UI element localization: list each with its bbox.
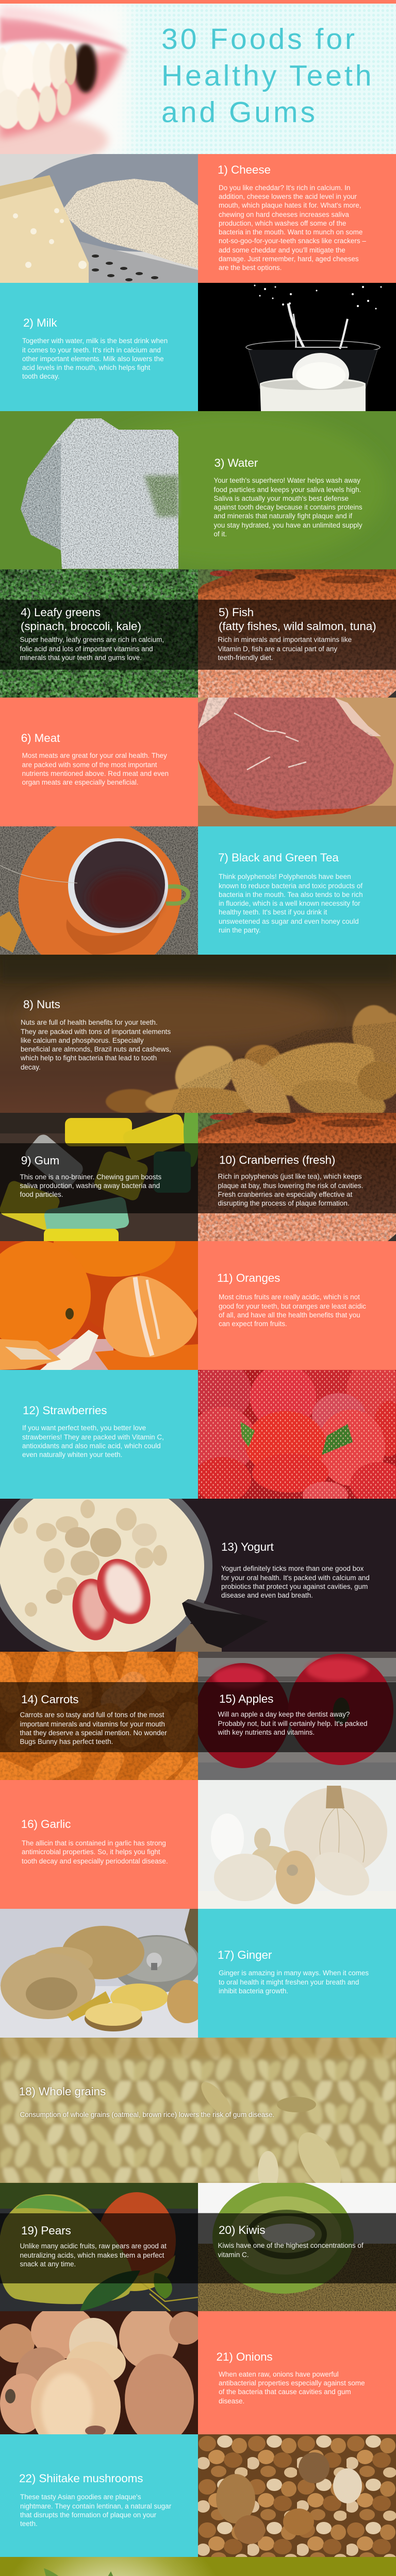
photo: smiling mouth bbox=[0, 4, 134, 154]
text block: Unlike many acidic fruits, raw pears are good at bbox=[20, 2242, 167, 2250]
text block: against tooth decay because it contains proteins bbox=[213, 503, 362, 511]
text block: are packed with some of the most important bbox=[22, 761, 157, 769]
text block: Most meats are great for your oral health. They bbox=[22, 752, 167, 759]
text block: which help to fight bacteria that lead to tooth bbox=[21, 1054, 157, 1062]
text block: These tasty Asian goodies are plaque's bbox=[20, 2493, 141, 2501]
heading: 19) Pears bbox=[21, 2224, 71, 2237]
panel: 10 cranberries bbox=[198, 1143, 396, 1213]
text block: disease. bbox=[219, 2397, 244, 2405]
text: celery bbox=[198, 2556, 396, 2576]
text block: that disrupts the formation of plaque on your bbox=[20, 2511, 156, 2519]
text block: nightmare. They contain lentinan, a natural sugar bbox=[20, 2502, 171, 2510]
text: yogurt bbox=[221, 1540, 370, 1599]
text block: food particles. bbox=[20, 1191, 63, 1198]
text block: antibacterial properties especially against some bbox=[219, 2379, 365, 2387]
text block: that they deserve a special mention. No wonder bbox=[20, 1729, 167, 1737]
text block: bacteria in the mouth. Want to munch on some bbox=[219, 228, 362, 236]
heading: 3) Water bbox=[214, 456, 258, 469]
text block bbox=[20, 2493, 171, 2528]
panel: 18 whole grains bbox=[0, 2037, 396, 2183]
panel: 11 oranges bbox=[198, 1241, 396, 1370]
text block: Carrots are so tasty and full of tons of the most bbox=[20, 1711, 164, 1719]
text block: Will an apple a day keep the dentist away? bbox=[218, 1710, 350, 1718]
text block: strawberries! They are packed with Vitamin C, bbox=[22, 1433, 164, 1441]
text block bbox=[221, 1565, 370, 1599]
text block: of it. bbox=[213, 530, 227, 538]
heading: 6) Meat bbox=[21, 732, 60, 744]
text block: inhibit bacteria growth. bbox=[219, 1987, 288, 1995]
photo: cup of tea bbox=[0, 826, 198, 955]
heading bbox=[21, 606, 141, 633]
text block: beneficial are almonds, Brazil nuts and cashews, bbox=[21, 1045, 171, 1053]
heading: 9) Gum bbox=[21, 1154, 59, 1167]
text block: tooth decay. bbox=[22, 372, 60, 380]
text block: plaque at bay, thus lowering the risk of cavities. bbox=[218, 1182, 363, 1190]
panel: 19 pears bbox=[0, 2213, 198, 2283]
photo: kiwi bbox=[198, 2183, 396, 2311]
heading: 7) Black and Green Tea bbox=[218, 851, 339, 864]
heading: 20) Kiwis bbox=[219, 2224, 265, 2236]
heading bbox=[219, 606, 376, 633]
heading: 13) Yogurt bbox=[221, 1540, 274, 1553]
text block: it comes to your teeth. It's rich in calcium and bbox=[22, 346, 161, 354]
text block bbox=[218, 636, 352, 662]
text block: folic acid and lots of important vitamins and bbox=[20, 645, 153, 653]
photo: ginger bbox=[0, 1909, 198, 2038]
heading: 15) Apples bbox=[219, 1692, 273, 1705]
text block: of the bacteria that cause cavities and gum bbox=[219, 2388, 351, 2396]
text block: good for your teeth, but oranges are least acidic bbox=[219, 1302, 366, 1310]
text block: important minerals and vitamins for your mouth bbox=[20, 1720, 165, 1728]
text block bbox=[219, 1969, 369, 1995]
heading: 18) Whole grains bbox=[19, 2085, 106, 2098]
text block: nutrients mentioned above. Red meat and even bbox=[22, 770, 169, 777]
text block: teeth. bbox=[20, 2520, 38, 2528]
text block bbox=[22, 337, 168, 380]
text block: When eaten raw, onions have powerful bbox=[219, 2370, 339, 2378]
text block: antioxidants and also malic acid, which could bbox=[22, 1442, 161, 1450]
text block: Together with water, milk is the best drink when bbox=[22, 337, 168, 345]
text block: Fresh cranberries are especially effective at bbox=[218, 1191, 352, 1198]
photo: brown rice bbox=[0, 2037, 396, 2183]
text block: Saliva is actually your mouth's best defense bbox=[213, 495, 349, 502]
text block: with key nutrients and vitamins. bbox=[218, 1728, 315, 1736]
text block bbox=[218, 2241, 364, 2259]
text block: antimicrobial properties. So, it helps you fight bbox=[22, 1848, 160, 1856]
text block: Yogurt definitely ticks more than one good box bbox=[221, 1565, 364, 1572]
photo: chewing gum bbox=[0, 1113, 198, 1241]
text block bbox=[219, 873, 363, 934]
text block: can expect from fruits. bbox=[219, 1320, 287, 1328]
text block: probiotics that protect you against cavities, gum bbox=[221, 1583, 368, 1590]
text block bbox=[219, 2370, 365, 2405]
photo: celery bbox=[0, 2556, 396, 2576]
text block: The allicin that is contained in garlic has strong bbox=[22, 1839, 166, 1847]
photo: broccoli bbox=[0, 569, 198, 698]
text block: Probably not, but it will certainly help. It's packed bbox=[218, 1720, 367, 1727]
text block: of all, and have all the health benefits that you bbox=[219, 1311, 360, 1319]
top strip bbox=[0, 0, 396, 4]
text block: in fluoride, which is a well known necessity for bbox=[219, 900, 360, 907]
text block: neutralizing acids, which makes them a perfect bbox=[20, 2251, 164, 2259]
text block: Nuts are full of health benefits for your teeth. bbox=[21, 1019, 158, 1026]
text block: food particles and keeps your saliva levels high. bbox=[213, 486, 361, 494]
text block: Vitamin D, fish are a crucial part of any bbox=[218, 645, 337, 653]
photo: garlic bbox=[198, 1780, 396, 1909]
heading: 14) Carrots bbox=[21, 1693, 78, 1706]
heading: 10) Cranberries (fresh) bbox=[219, 1154, 335, 1166]
heading: 17) Ginger bbox=[218, 1948, 272, 1961]
photo: peanuts bbox=[0, 955, 396, 1113]
panel: 16 garlic bbox=[0, 1780, 198, 1909]
heading: 2) Milk bbox=[23, 316, 57, 329]
photo: shiitake mushrooms bbox=[198, 2434, 396, 2557]
text block: minerals that your teeth and gums love. bbox=[20, 654, 142, 662]
text block bbox=[22, 1424, 164, 1459]
text block: decay. bbox=[21, 1063, 41, 1071]
text block: unsweetened as sugar and even honey could bbox=[219, 918, 359, 925]
panel: 17 ginger bbox=[198, 1909, 396, 2038]
panel: 6 meat bbox=[0, 698, 198, 826]
photo: red apples bbox=[198, 1652, 396, 1780]
heading: 1) Cheese bbox=[218, 163, 271, 176]
text block: Super healthy, leafy greens are rich in calcium, bbox=[20, 636, 164, 643]
text block: to oral health it might freshen your breath and bbox=[219, 1978, 359, 1986]
text block bbox=[213, 477, 362, 538]
text block bbox=[21, 1019, 171, 1071]
panel: 9 gum bbox=[0, 1143, 198, 1213]
text block: addition, cheese lowers the acid level in your bbox=[219, 193, 357, 200]
text block bbox=[20, 636, 164, 662]
text block: Rich in polyphenols (just like tea), which keeps bbox=[218, 1173, 362, 1180]
panel: 5 fish bbox=[198, 600, 396, 670]
text block: add some cheddar and you'll mitigate the bbox=[219, 246, 345, 254]
heading: 21) Onions bbox=[217, 2350, 273, 2363]
text block: other important elements. Milk also lowers the bbox=[22, 355, 164, 363]
text block bbox=[22, 1839, 168, 1865]
text block: Consumption of whole grains (oatmeal, brown rice) lowers the risk of gum disease. bbox=[20, 2111, 274, 2119]
text block: not-so-goo-for-your-teeth snacks like crackers – bbox=[219, 237, 366, 245]
text block bbox=[218, 1710, 367, 1736]
panel: 23 celery bbox=[0, 2556, 396, 2576]
photo: onions bbox=[0, 2311, 198, 2434]
text block: saliva production, washing away bacteria and bbox=[20, 1182, 160, 1190]
panel: 2 milk bbox=[0, 283, 198, 411]
photo: pears bbox=[0, 2183, 198, 2311]
panel: 15 apples bbox=[198, 1682, 396, 1752]
photo: raw steak bbox=[198, 698, 396, 826]
text block bbox=[20, 2242, 167, 2268]
text block: Your teeth's superhero! Water helps wash away bbox=[213, 477, 360, 484]
photo: cheese and grater bbox=[0, 154, 198, 283]
text block: Rich in minerals and important vitamins like bbox=[218, 636, 352, 643]
heading: 8) Nuts bbox=[23, 998, 60, 1011]
heading: 12) Strawberries bbox=[23, 1403, 107, 1417]
title: and Gums bbox=[161, 96, 318, 129]
text block bbox=[20, 1173, 161, 1198]
heading: 5) Fish bbox=[219, 606, 254, 619]
text block bbox=[219, 1293, 366, 1328]
text block: They are packed with tons of important elements bbox=[21, 1028, 171, 1036]
text block bbox=[219, 184, 366, 272]
text block: are the best options. bbox=[219, 264, 282, 272]
text block: mouth, which plaque hates it for. What's more, bbox=[219, 201, 361, 209]
panel: 1 cheese bbox=[198, 154, 396, 283]
text block bbox=[218, 1173, 363, 1207]
text block: Ginger is amazing in many ways. When it comes bbox=[219, 1969, 369, 1977]
heading: 11) Oranges bbox=[217, 1272, 280, 1284]
text block: and minerals that naturally fight plaque and if bbox=[213, 512, 352, 520]
text block: damage. Just remember, hard, aged cheeses bbox=[219, 255, 359, 263]
text block: production, which washes off some of the bbox=[219, 219, 346, 227]
text block: tooth decay and especially periodontal disease. bbox=[22, 1857, 168, 1865]
heading: (spinach, broccoli, kale) bbox=[21, 620, 141, 633]
text: 3 water bbox=[213, 456, 362, 538]
photo: salmon fillet repeat bbox=[198, 1113, 396, 1241]
title: 30 Foods for bbox=[161, 23, 357, 56]
heading: 16) Garlic bbox=[21, 1818, 71, 1831]
photo: strawberries bbox=[198, 1370, 396, 1499]
heading: 22) Shiitake mushrooms bbox=[19, 2472, 143, 2485]
title bbox=[161, 23, 374, 129]
photo: salmon fillet bbox=[198, 569, 396, 698]
text block: Bugs Bunny has perfect teeth. bbox=[20, 1738, 113, 1745]
text block: Think polyphenols! Polyphenols have been bbox=[219, 873, 351, 880]
text block: acid levels in the mouth, which helps fight bbox=[22, 364, 150, 371]
text block: for your oral health. It's packed with calcium and bbox=[221, 1574, 370, 1582]
text block: you stay hydrated, you have an unlimited supply bbox=[213, 521, 362, 529]
text block: Kiwis have one of the highest concentrations of bbox=[218, 2242, 364, 2249]
text block: chewing on hard cheeses increases saliva bbox=[219, 211, 349, 218]
panel: 21 onions bbox=[198, 2311, 396, 2434]
text block: disease and even bad breath. bbox=[221, 1591, 313, 1599]
text block: If you want perfect teeth, you better love bbox=[22, 1424, 146, 1432]
panel: 8 nuts bbox=[0, 955, 396, 1113]
panel: 14 carrots bbox=[0, 1682, 198, 1752]
text block: bacteria in the mouth. Tea also tends to be rich bbox=[219, 891, 363, 899]
heading: (fatty fishes, wild salmon, tuna) bbox=[219, 620, 376, 633]
panel: 7 black and green tea bbox=[198, 826, 396, 955]
text block bbox=[20, 1711, 167, 1745]
photo: yogurt with oats and strawberries bbox=[0, 1499, 268, 1652]
text block: like calcium and phosphorus. Especially bbox=[21, 1037, 144, 1044]
photo: milk splash bbox=[198, 283, 396, 411]
photo: oranges bbox=[0, 1241, 198, 1370]
panel: 13 yogurt bbox=[0, 1499, 396, 1652]
panel: 22 shiitake mushrooms bbox=[0, 2434, 198, 2557]
title: Healthy Teeth bbox=[161, 59, 374, 92]
text block: Most citrus fruits are really acidic, which is not bbox=[219, 1293, 360, 1301]
text block: disrupting the process of plaque formation. bbox=[218, 1199, 350, 1207]
panel: 12 strawberries bbox=[0, 1370, 198, 1499]
photo: carrots bbox=[0, 1652, 198, 1780]
text block bbox=[22, 752, 169, 786]
panel: 4 leafy greens bbox=[0, 600, 198, 670]
text block: organ meats are especially beneficial. bbox=[22, 778, 138, 786]
panel: header bbox=[0, 4, 396, 154]
heading: 4) Leafy greens bbox=[21, 606, 101, 619]
photo: water splash on green bbox=[0, 411, 396, 569]
panel: 20 kiwis bbox=[198, 2213, 396, 2283]
text block: Do you like cheddar? It's rich in calcium. In bbox=[219, 184, 350, 192]
text block: healthy teeth. It's best if you drink it bbox=[219, 908, 327, 916]
text block: ruin the party. bbox=[219, 926, 261, 934]
text block: known to reduce bacteria and toxic products of bbox=[219, 882, 362, 890]
text block: even naturally whiten your teeth. bbox=[22, 1451, 122, 1459]
text block: vitamin C. bbox=[218, 2251, 249, 2259]
text block: snack at any time. bbox=[20, 2260, 76, 2268]
text block: This one is a no-brainer. Chewing gum boosts bbox=[20, 1173, 161, 1181]
text block: teeth-friendly diet. bbox=[218, 654, 273, 662]
